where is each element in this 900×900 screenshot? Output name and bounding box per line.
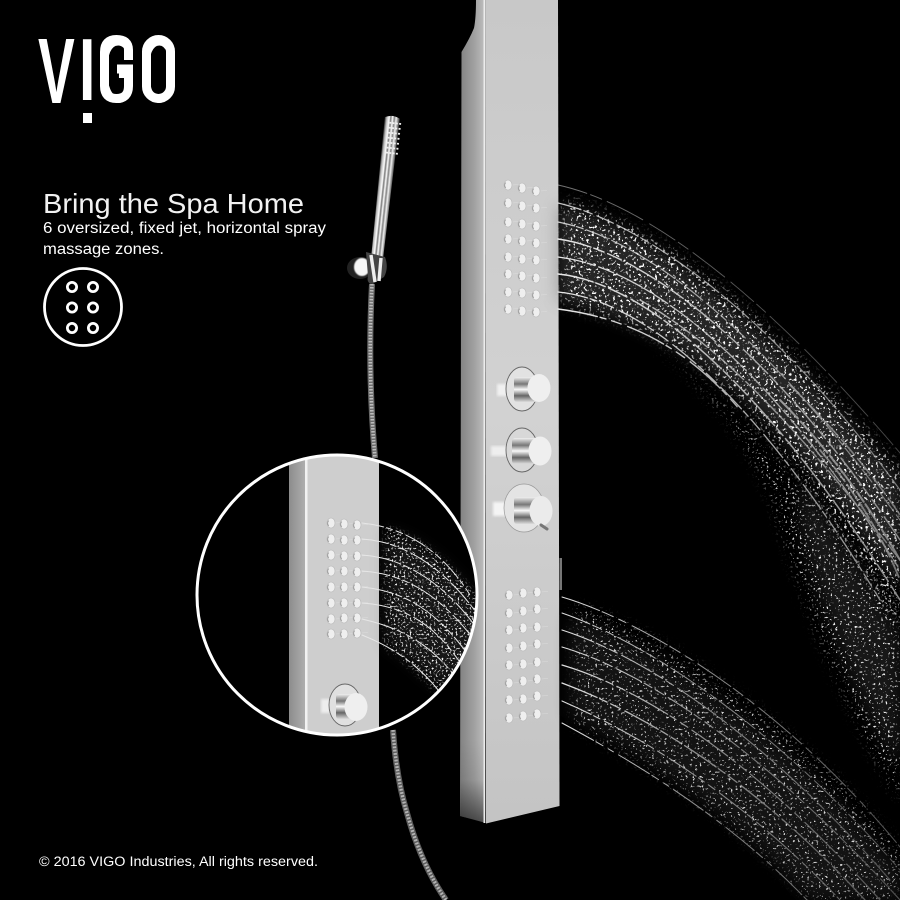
control knob 3 with lever — [493, 484, 552, 532]
lens knob — [321, 684, 368, 726]
logo: VIGO — [38, 20, 176, 124]
hand shower head — [370, 115, 402, 258]
lens panel front — [308, 450, 379, 740]
body text — [43, 220, 326, 258]
spray droplets: sparse lower fan — [640, 330, 900, 800]
icon: six massage jets — [44, 268, 122, 346]
lower jet group — [505, 587, 548, 723]
lower water spray — [562, 597, 900, 900]
panel highlight edge — [484, 0, 485, 823]
spray glow — [558, 205, 900, 590]
upper jet group — [504, 180, 547, 317]
body text: 6 oversized, fixed jet, horizontal spray — [43, 220, 326, 237]
magnified detail circle — [197, 450, 480, 740]
lens ring — [197, 455, 477, 735]
body text: massage zones. — [43, 241, 164, 258]
control knob 1 — [497, 367, 550, 411]
hand shower hose — [370, 284, 446, 900]
panel side clip — [560, 558, 562, 590]
upper water spray — [558, 185, 900, 800]
lower spray droplets — [575, 605, 900, 900]
lower spray glow — [570, 615, 900, 900]
control knob 2 — [491, 428, 552, 472]
lens jets — [327, 518, 368, 639]
panel side face — [460, 0, 486, 823]
panel front face — [485, 0, 560, 824]
shower panel body — [460, 0, 562, 824]
logo: VIGO: G — [101, 20, 135, 122]
copyright: © 2016 VIGO Industries, All rights reserved. — [39, 854, 318, 869]
logo: VIGO: V — [38, 20, 75, 124]
heading: Bring the Spa Home — [43, 188, 304, 219]
hand shower wall holder — [347, 252, 387, 284]
shower nozzles — [386, 123, 401, 154]
lower spray streaks — [562, 597, 900, 900]
spray streaks — [558, 185, 900, 600]
logo: VIGO: O — [143, 21, 176, 123]
lens background — [197, 455, 477, 735]
spray droplets: dense core — [565, 200, 900, 630]
lens spray — [362, 523, 480, 695]
logo: VIGO: I — [79, 20, 95, 119]
lens panel side — [289, 450, 305, 740]
